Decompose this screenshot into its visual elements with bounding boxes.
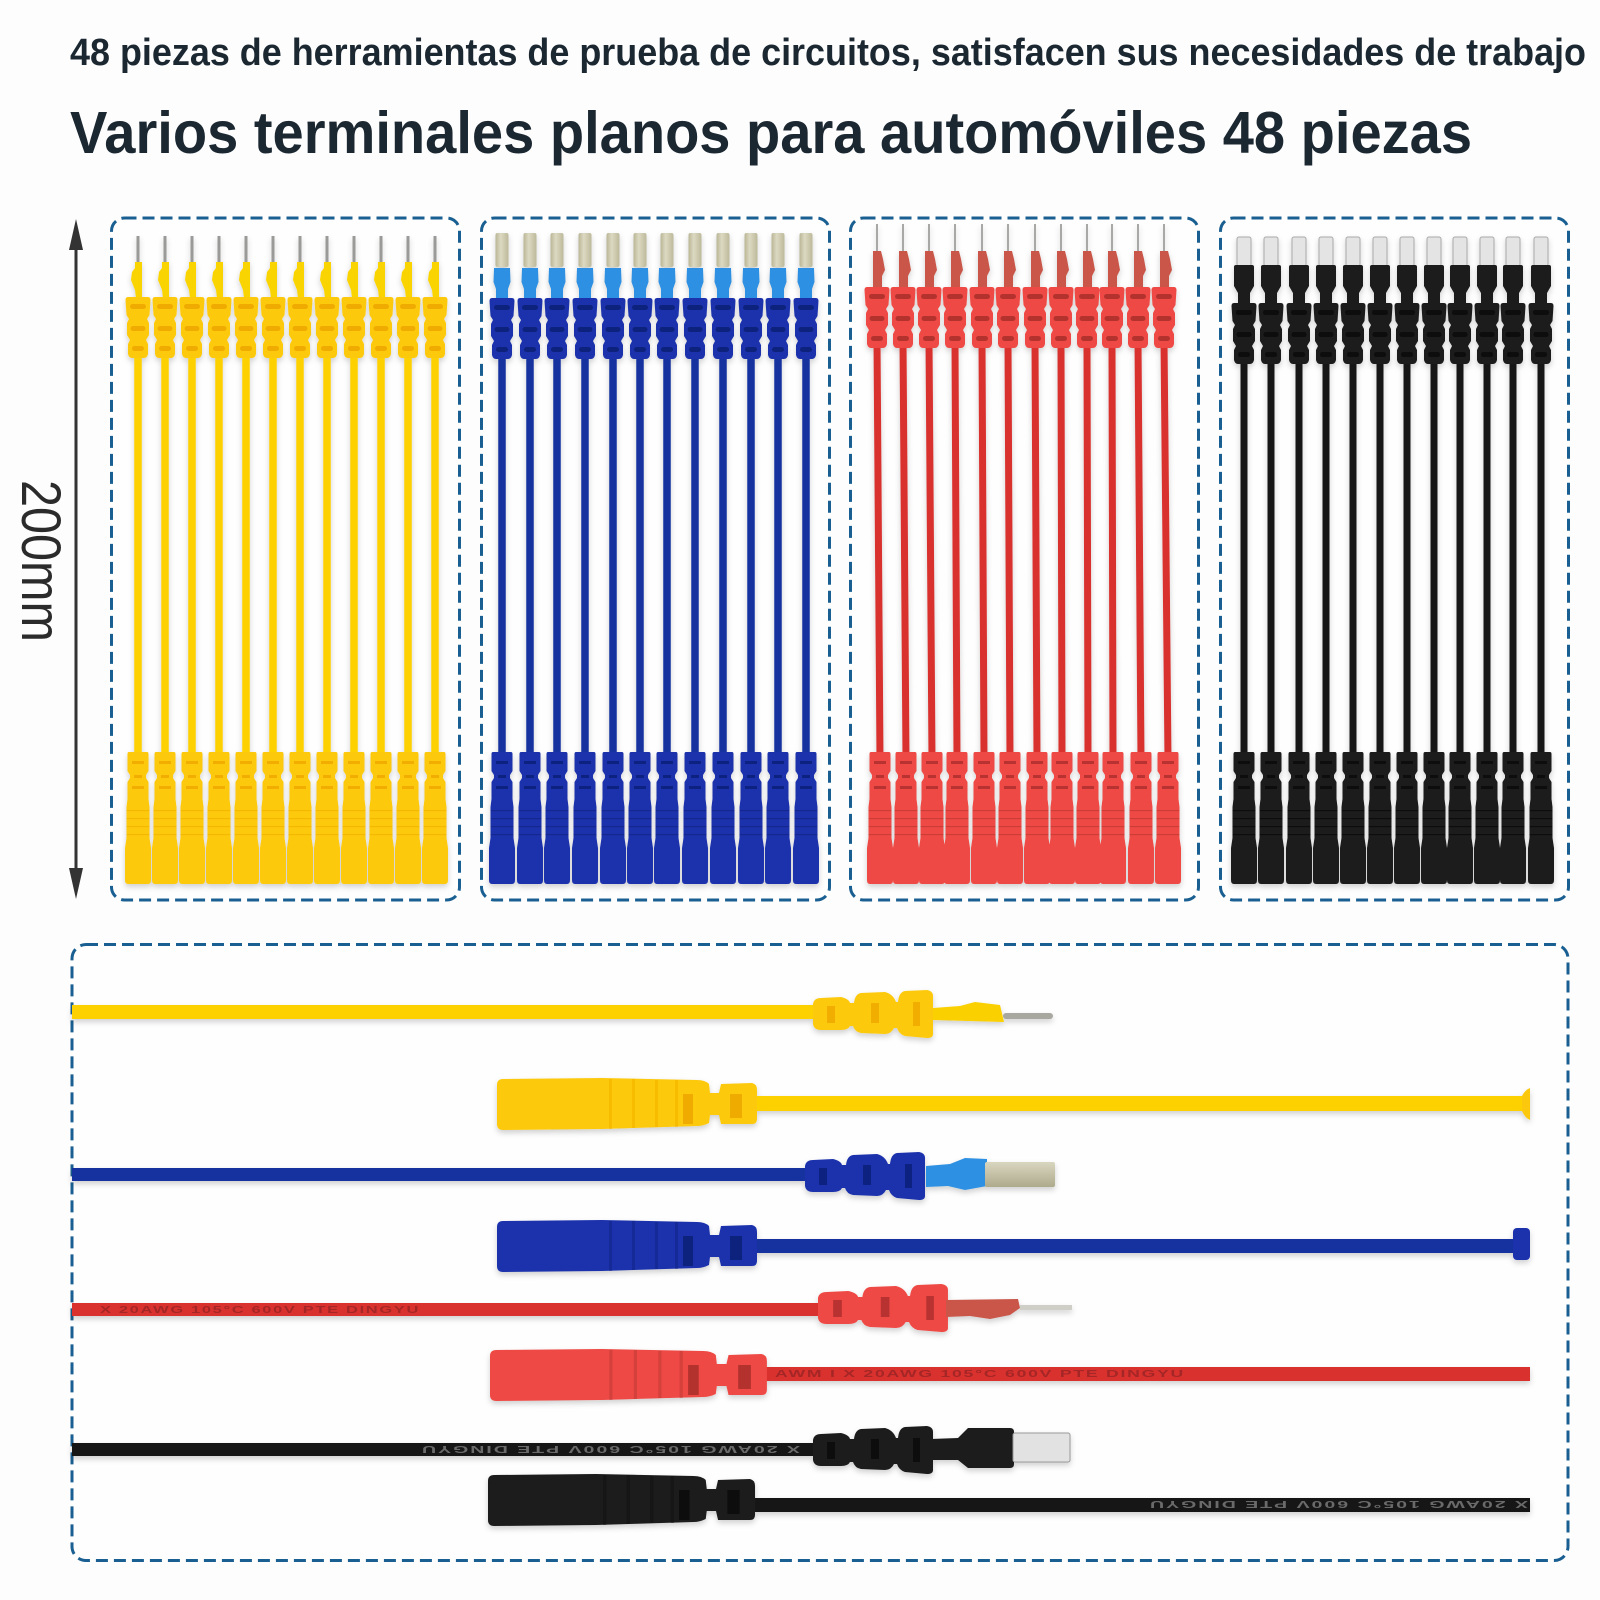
wire marking: X 20AWG 105°C 600V PTE DINGYU (100, 1305, 420, 1316)
red female lead (490, 1349, 1530, 1401)
yellow female lead (497, 1078, 1530, 1130)
panel frame (482, 218, 830, 900)
red lead set (864, 224, 1181, 884)
panel: blue leads (482, 218, 830, 900)
blue male lead (72, 1152, 1055, 1200)
yellow lead set (125, 236, 448, 884)
panel frame (112, 218, 460, 900)
panel: yellow leads (112, 218, 460, 900)
dimension label: 200mm (10, 480, 73, 642)
title: Varios terminales planos para automóviles 48 piezas (70, 100, 1472, 166)
blue female lead (497, 1220, 1530, 1272)
blue lead set (489, 233, 819, 884)
black male lead (72, 1426, 1070, 1474)
black female lead (488, 1474, 1530, 1526)
wire marking: X 20AWG 105°C 600V PTE DINGYU (1148, 1498, 1528, 1509)
panel: black leads (1220, 218, 1568, 900)
panel frame (72, 944, 1568, 1560)
red male lead (72, 1284, 1072, 1332)
panel frame (850, 218, 1198, 900)
dimension arrow (69, 219, 83, 899)
panel: close-up leads (72, 944, 1568, 1560)
black lead set (1231, 237, 1554, 884)
wire marking: AWM I X 20AWG 105°C 600V PTE DINGYU (775, 1369, 1185, 1380)
panel frame (1220, 218, 1568, 900)
yellow male lead (72, 990, 1053, 1038)
wire marking: X 20AWG 105°C 600V PTE DINGYU (420, 1443, 800, 1454)
panel: red leads (850, 218, 1198, 900)
